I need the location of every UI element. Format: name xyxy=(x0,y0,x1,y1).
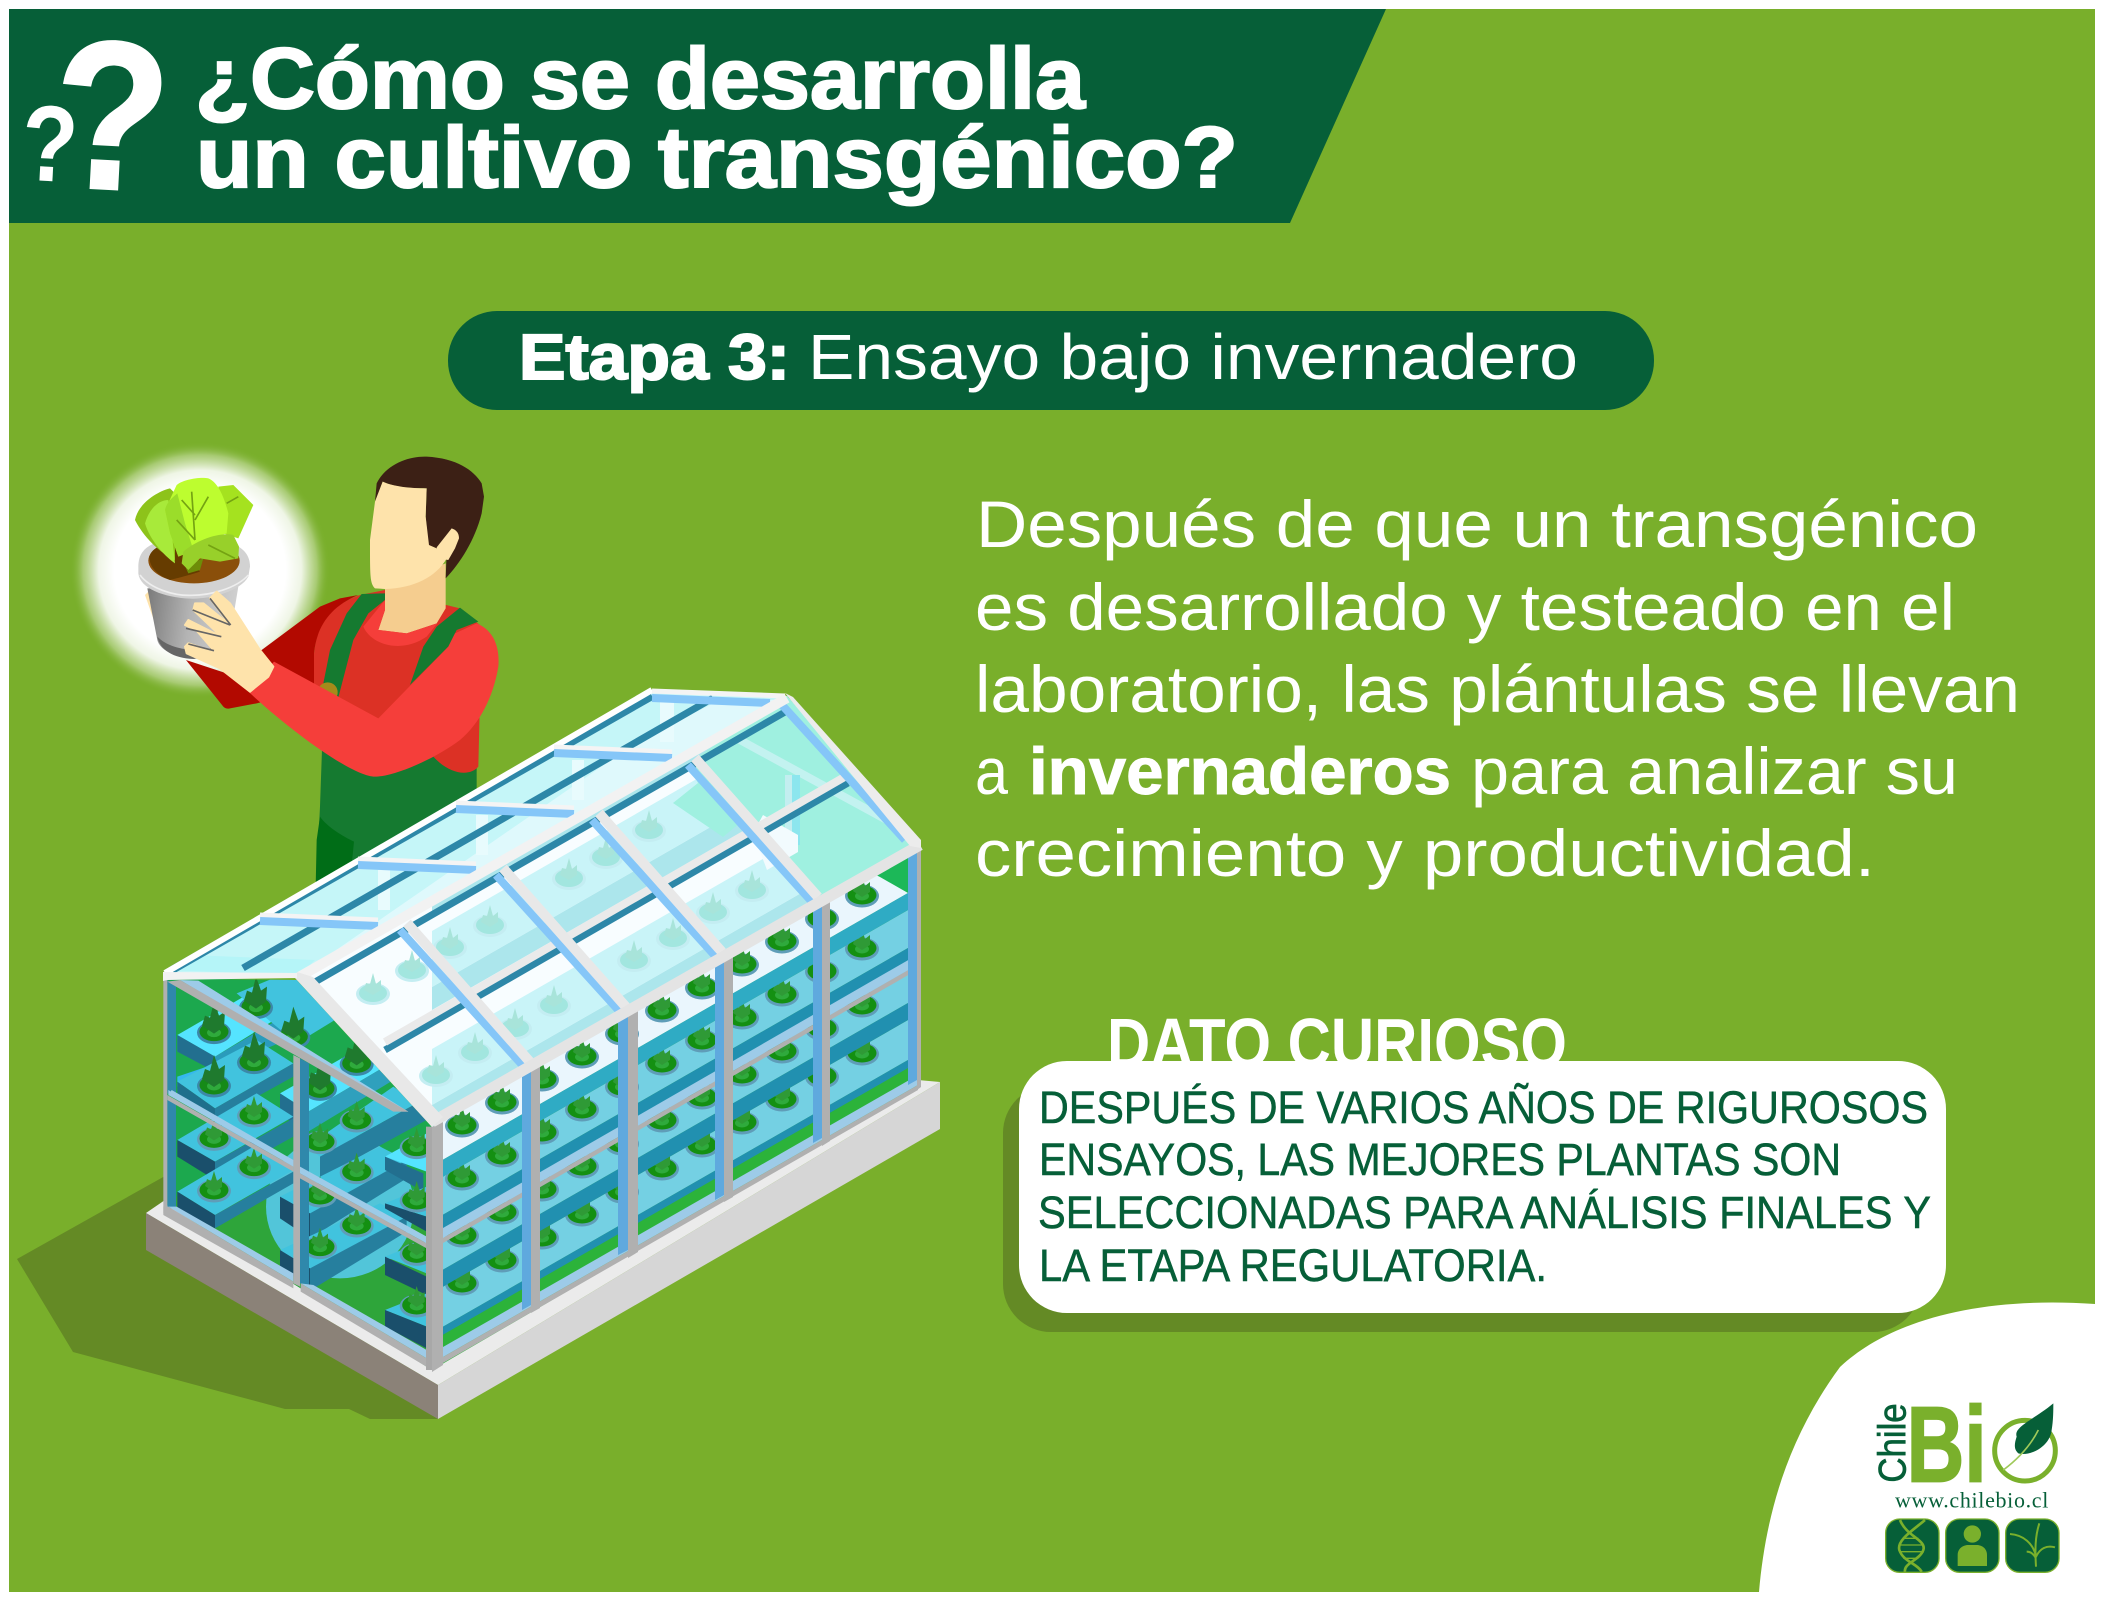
gable wall frame xyxy=(163,972,432,1370)
body text: laboratorio, las plántulas se llevan xyxy=(975,652,2020,726)
lettuce xyxy=(135,478,253,573)
stage pill heading xyxy=(448,311,1654,410)
title text: ¿Cómo se desarrolla xyxy=(195,31,1086,127)
ridge, eave and slanted front frame xyxy=(163,693,921,1127)
gable plants xyxy=(197,977,434,1317)
logo word Bi: Bi xyxy=(1907,1385,1987,1505)
buckle xyxy=(318,682,338,702)
roof purlins xyxy=(315,712,848,1050)
hand xyxy=(185,592,273,692)
body text: invernaderos xyxy=(1029,734,1451,808)
illustration: greenhouse xyxy=(17,607,940,1419)
posts xyxy=(293,1055,300,1287)
shirt torso xyxy=(313,590,482,773)
concrete base xyxy=(146,1080,940,1419)
tinted far glass xyxy=(689,696,918,900)
back roof slope xyxy=(165,690,787,977)
pot xyxy=(138,538,250,659)
body text xyxy=(975,487,2020,890)
callout: dato curioso xyxy=(1003,1061,1946,1332)
icon: DNA xyxy=(1886,1519,1939,1572)
ear xyxy=(437,528,459,560)
icon: person xyxy=(1946,1519,1999,1572)
logo website: www.chilebio.cl xyxy=(1895,1488,2048,1513)
suspenders xyxy=(323,593,478,700)
neck xyxy=(378,563,446,633)
back arm xyxy=(186,595,358,709)
callout: dato curioso: LA ETAPA REGULATORIA. xyxy=(1039,1240,1547,1291)
hair xyxy=(375,457,484,578)
sill xyxy=(168,1207,293,1282)
front roof slope xyxy=(163,693,923,1127)
mid rail xyxy=(168,1090,293,1167)
body text: crecimiento y productividad. xyxy=(975,816,1875,890)
logo word Chile: Chile xyxy=(1871,1403,1915,1483)
callout: dato curioso: ENSAYOS, LAS MEJORES PLANTAS SON xyxy=(1039,1134,1841,1185)
callout: dato curioso: DESPUÉS DE VARIOS AÑOS DE RIGUROSOS xyxy=(1039,1082,1928,1133)
body text: es desarrollado y testeado en el xyxy=(975,570,1955,644)
back hand xyxy=(145,592,155,623)
gable wall interior xyxy=(163,970,437,1373)
icon: plant xyxy=(2006,1519,2059,1572)
overalls xyxy=(316,740,477,887)
illustration: white glow behind plant xyxy=(70,442,330,698)
body text: a xyxy=(975,734,1008,808)
body text: Después de que un transgénico xyxy=(976,487,1978,561)
icon: question marks: ? xyxy=(19,82,81,205)
stage pill heading: Etapa 3: xyxy=(519,321,790,393)
stage pill heading: Ensayo bajo invernadero xyxy=(808,321,1578,393)
right wall rails and posts xyxy=(432,843,921,1372)
back planters xyxy=(177,970,427,1348)
logo ring and leaf xyxy=(1995,1403,2055,1481)
logo corner panel xyxy=(1759,1302,2103,1600)
logo: ChileBio xyxy=(1871,1385,2059,1572)
title banner xyxy=(9,0,1386,237)
ground shadow xyxy=(17,1176,438,1419)
roof rafters xyxy=(400,705,905,1067)
callout: dato curioso: SELECCIONADAS PARA ANÁLISIS FINALES Y xyxy=(1038,1187,1931,1238)
face xyxy=(370,482,447,589)
collar xyxy=(363,600,437,646)
body text: para analizar su xyxy=(1471,734,1958,808)
title text xyxy=(195,31,1238,206)
title text: un cultivo transgénico? xyxy=(196,110,1238,206)
front arm xyxy=(248,623,499,777)
illustration: farmer holding potted plant xyxy=(135,457,499,887)
heading: dato curioso: DATO CURIOSO xyxy=(1107,1004,1567,1082)
right wall with planter tiers xyxy=(432,844,918,1370)
slanted gable brace xyxy=(180,980,408,1112)
icon: question marks: ? xyxy=(48,0,176,237)
